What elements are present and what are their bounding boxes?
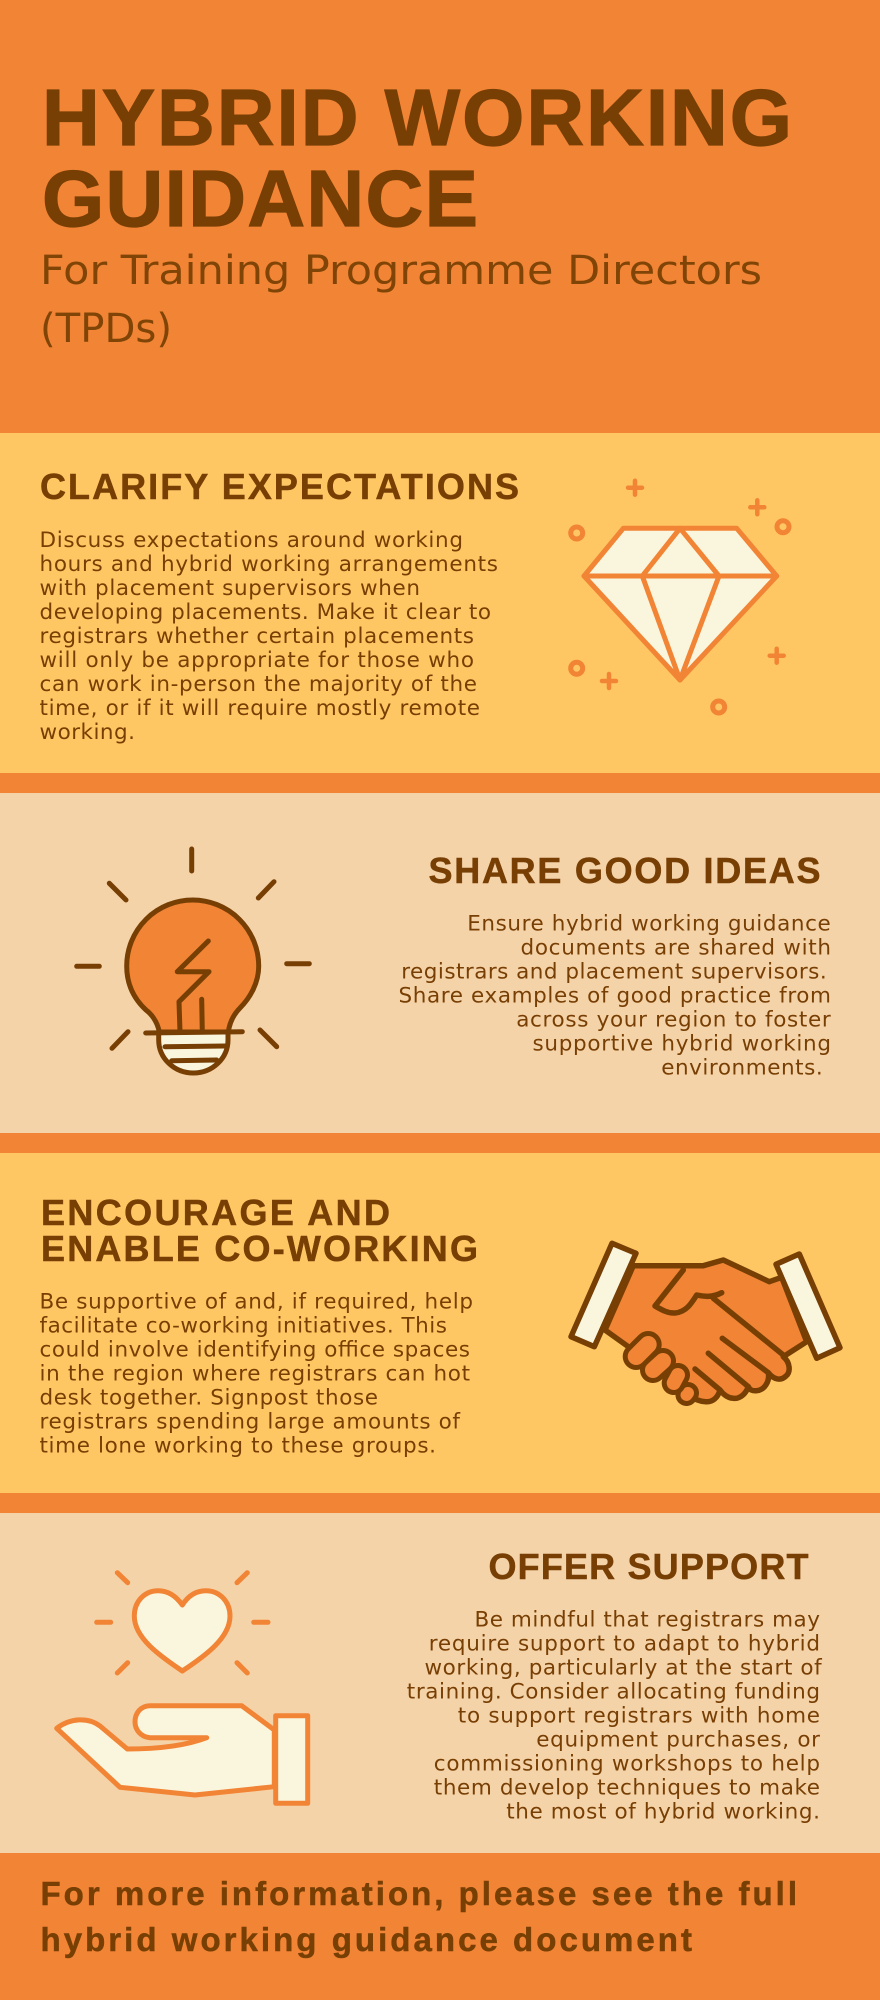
text block: offer support: the most of hybrid working. bbox=[506, 1800, 820, 1825]
subtitle: (TPDs) bbox=[40, 306, 172, 352]
text block: clarify expectations: hours and hybrid working arrangements bbox=[40, 552, 498, 577]
text block: share good ideas: supportive hybrid working bbox=[532, 1032, 831, 1057]
icon: diamond bbox=[571, 481, 789, 713]
icon: hand holding heart bbox=[57, 1573, 308, 1803]
text block: clarify expectations: Discuss expectations around working bbox=[40, 528, 463, 553]
text block: share good ideas: documents are shared with bbox=[520, 936, 831, 961]
text block: encourage and enable co-working: could involve identifying office spaces bbox=[40, 1338, 470, 1363]
subtitle bbox=[40, 248, 762, 352]
text block: encourage and enable co-working: registrars spending large amounts of bbox=[40, 1410, 460, 1435]
text block: encourage and enable co-working: time lone working to these groups. bbox=[40, 1434, 436, 1459]
text block: clarify expectations: with placement supervisors when bbox=[40, 576, 420, 601]
panel: share good ideas bbox=[0, 793, 880, 1133]
footer: more information: For more information, please see the full bbox=[40, 1875, 797, 1912]
text block: offer support: them develop techniques to make bbox=[434, 1776, 820, 1801]
text block: clarify expectations: working. bbox=[40, 720, 135, 745]
panel: header bbox=[0, 0, 880, 433]
text block: encourage and enable co-working: facilitate co-working initiatives. This bbox=[40, 1314, 447, 1339]
title bbox=[42, 73, 792, 243]
heading: encourage and enable co-working: ENABLE CO-WORKING bbox=[41, 1228, 478, 1269]
icon: light bulb bbox=[77, 849, 309, 1073]
text block: offer support: commissioning workshops to help bbox=[434, 1752, 820, 1777]
text block: encourage and enable co-working: desk together. Signpost those bbox=[40, 1386, 378, 1411]
text block: offer support: training. Consider allocating funding bbox=[407, 1680, 820, 1705]
text block: encourage and enable co-working bbox=[40, 1290, 473, 1459]
text block: clarify expectations: developing placements. Make it clear to bbox=[40, 600, 491, 625]
text block: share good ideas bbox=[398, 912, 831, 1081]
heading: clarify expectations: CLARIFY EXPECTATIONS bbox=[40, 466, 519, 507]
text block: offer support bbox=[407, 1608, 822, 1825]
footer: more information bbox=[40, 1875, 797, 1958]
footer: more information: hybrid working guidance document bbox=[40, 1921, 692, 1958]
text block: encourage and enable co-working: in the region where registrars can hot bbox=[40, 1362, 470, 1387]
text block: clarify expectations: can work in-person the majority of the bbox=[40, 672, 477, 697]
text block: encourage and enable co-working: Be supportive of and, if required, help bbox=[40, 1290, 473, 1315]
heading: encourage and enable co-working: ENCOURAGE AND bbox=[41, 1192, 390, 1233]
subtitle: For Training Programme Directors bbox=[40, 248, 762, 294]
text block: offer support: working, particularly at the start of bbox=[424, 1656, 822, 1681]
panel: offer support bbox=[0, 1513, 880, 1853]
heading: share good ideas: SHARE GOOD IDEAS bbox=[428, 850, 820, 891]
title: GUIDANCE bbox=[42, 154, 478, 243]
text block: clarify expectations: time, or if it will require mostly remote bbox=[40, 696, 480, 721]
text block: share good ideas: Ensure hybrid working guidance bbox=[467, 912, 831, 937]
text block: offer support: to support registrars with home bbox=[458, 1704, 820, 1729]
text block: share good ideas: Share examples of good practice from bbox=[398, 984, 831, 1009]
text block: offer support: Be mindful that registrars may bbox=[474, 1608, 820, 1633]
text block: clarify expectations: will only be appropriate for those who bbox=[40, 648, 474, 673]
panel: encourage and enable co-working bbox=[0, 1153, 880, 1493]
text block: share good ideas: across your region to foster bbox=[516, 1008, 831, 1033]
text block: offer support: equipment purchases, or bbox=[536, 1728, 820, 1753]
panel: clarify expectations bbox=[0, 433, 880, 773]
text block: share good ideas: environments. bbox=[661, 1056, 823, 1081]
icon: handshake bbox=[571, 1243, 840, 1402]
text block: clarify expectations bbox=[40, 528, 498, 745]
text block: share good ideas: registrars and placement supervisors. bbox=[401, 960, 827, 985]
text block: clarify expectations: registrars whether certain placements bbox=[40, 624, 474, 649]
text block: offer support: require support to adapt to hybrid bbox=[429, 1632, 820, 1657]
heading: encourage and enable co-working bbox=[41, 1192, 478, 1269]
title: HYBRID WORKING bbox=[42, 73, 792, 162]
heading: offer support: OFFER SUPPORT bbox=[488, 1546, 808, 1587]
